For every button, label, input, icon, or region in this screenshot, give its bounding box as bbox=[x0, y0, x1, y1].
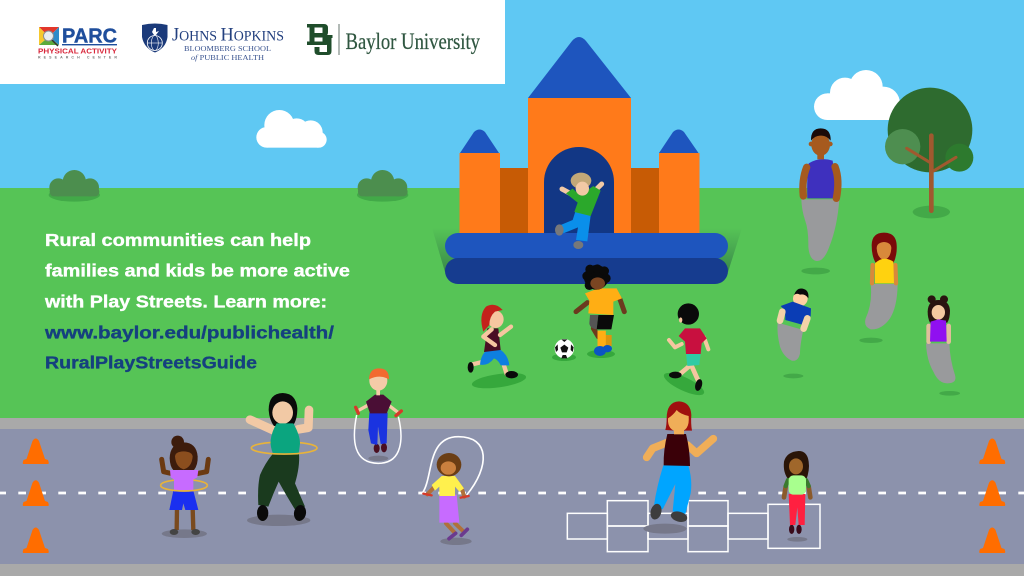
sack racer: man bbox=[801, 128, 839, 274]
logo: PARC: RESEARCH CENTER bbox=[38, 56, 117, 60]
bush: right bbox=[357, 170, 408, 202]
logo: Johns Hopkins: of PUBLIC HEALTH bbox=[191, 53, 265, 62]
cones: left bbox=[23, 438, 49, 553]
soccer player: red-haired child bbox=[468, 305, 527, 391]
road bbox=[0, 418, 1024, 576]
soccer player: child in yellow bbox=[576, 264, 624, 358]
tree bbox=[885, 88, 973, 218]
main message text: families and kids be more active bbox=[45, 261, 350, 281]
main message text: RuralPlayStreetsGuide bbox=[45, 353, 257, 373]
logo: PARC: PARC bbox=[62, 26, 117, 48]
jump rope boy bbox=[354, 368, 401, 463]
cloud: right bbox=[814, 70, 900, 120]
soccer ball bbox=[552, 339, 576, 361]
hula hoop woman bbox=[247, 393, 317, 526]
main message text: with Play Streets. Learn more: bbox=[44, 291, 327, 311]
logo: Johns Hopkins: JOHNS HOPKINS bbox=[172, 24, 284, 46]
logo: PARC: PHYSICAL ACTIVITY bbox=[38, 48, 117, 56]
logo banner bbox=[0, 0, 505, 84]
logo: Johns Hopkins: BLOOMBERG SCHOOL bbox=[184, 44, 271, 53]
hopscotch woman bbox=[643, 401, 713, 534]
sack racer: woman in yellow bbox=[859, 233, 898, 343]
grass field bbox=[0, 188, 1024, 419]
sky background bbox=[0, 0, 1024, 190]
cloud: left bbox=[256, 110, 327, 148]
bounce house castle bbox=[432, 37, 742, 284]
logo: PARC bbox=[38, 26, 117, 60]
hopscotch girl bbox=[784, 451, 810, 542]
child bouncing in castle bbox=[555, 173, 602, 249]
cones: right bbox=[979, 438, 1005, 553]
main message text: Rural communities can help bbox=[45, 230, 311, 250]
main message text: www.baylor.edu/publichealth/ bbox=[44, 322, 334, 342]
sack racer: girl in purple bbox=[926, 295, 960, 396]
hula hoop girl bbox=[161, 436, 208, 538]
logo: Baylor University bbox=[307, 24, 480, 55]
sack racer: boy in blue bbox=[777, 288, 811, 378]
hopscotch grid bbox=[567, 501, 820, 552]
main message text bbox=[44, 230, 350, 373]
logo: Baylor University: Baylor University bbox=[346, 29, 480, 54]
bush: left bbox=[49, 170, 100, 202]
logo: Johns Hopkins bbox=[142, 24, 284, 62]
jump rope girl bbox=[423, 437, 483, 545]
soccer player: boy in red bbox=[661, 303, 708, 399]
